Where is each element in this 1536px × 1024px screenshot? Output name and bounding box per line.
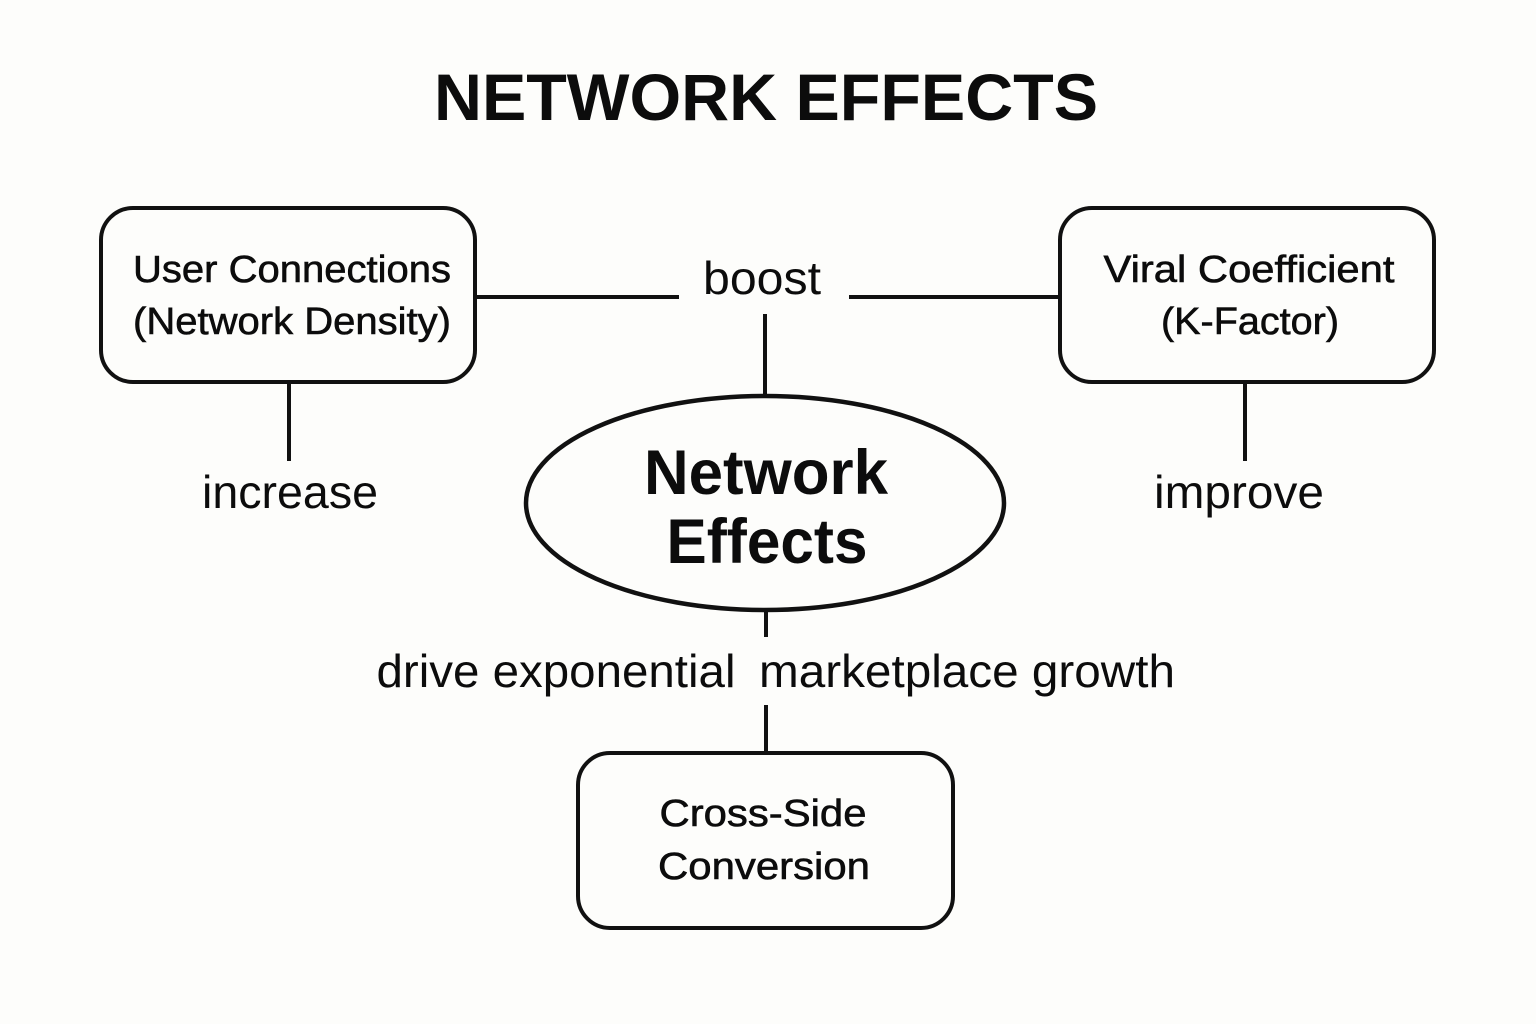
box: user connections: User Connections	[133, 249, 451, 291]
connector: user connections to boost	[475, 295, 679, 299]
connector: drive label to cross-side	[764, 705, 768, 753]
connector: user connections to increase	[287, 382, 291, 461]
title: NETWORK EFFECTS	[434, 60, 1098, 134]
box: viral coefficient	[1060, 208, 1434, 382]
box: cross-side conversion: Conversion	[658, 846, 870, 888]
connector: viral coefficient to improve	[1243, 382, 1247, 461]
central ellipse: network effects: Effects	[666, 507, 868, 577]
connector: boost to ellipse	[763, 314, 767, 396]
label: boost: boost	[703, 252, 821, 304]
label: drive exponential: drive exponential	[376, 645, 736, 697]
label: increase: increase	[202, 466, 378, 518]
connector: boost to viral coefficient	[849, 295, 1060, 299]
connector: ellipse to drive label	[764, 610, 768, 637]
box: user connections	[101, 208, 475, 382]
box: cross-side conversion: Cross-Side	[660, 793, 866, 835]
box: viral coefficient: (K-Factor)	[1161, 301, 1339, 343]
box: cross-side conversion	[578, 753, 953, 928]
label: marketplace growth: marketplace growth	[759, 645, 1175, 697]
central ellipse: network effects	[526, 396, 1004, 610]
central ellipse: network effects: Network	[644, 438, 889, 508]
box: viral coefficient: Viral Coefficient	[1104, 249, 1395, 291]
box: user connections: (Network Density)	[133, 301, 451, 343]
label: improve: improve	[1154, 466, 1324, 518]
